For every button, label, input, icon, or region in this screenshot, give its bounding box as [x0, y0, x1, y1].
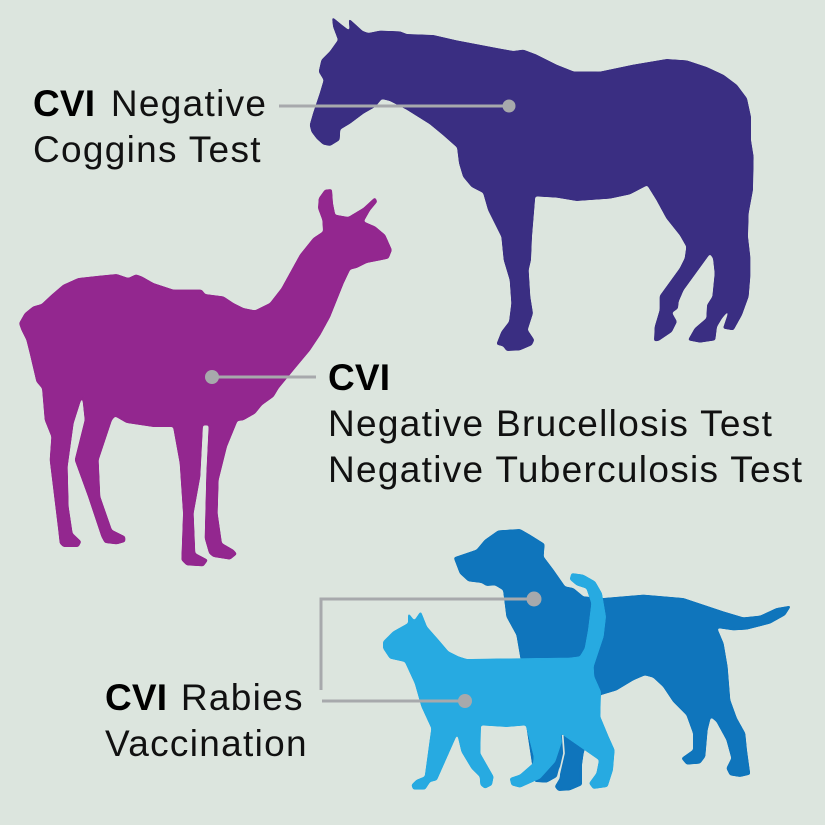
text: llama requirements: Negative Tuberculosis Test — [328, 449, 803, 490]
cat callout line and dot — [322, 694, 472, 708]
dog callout line and dot — [321, 592, 542, 690]
text: llama requirements: Negative Brucellosis Test — [328, 403, 773, 444]
horse silhouette — [310, 17, 753, 351]
text: horse requirements: CVI Negative — [33, 83, 267, 124]
text: horse requirements — [33, 83, 267, 170]
dog silhouette — [454, 529, 791, 791]
horse callout line and dot — [279, 100, 516, 112]
text: dog and cat requirements: CVI Rabies — [105, 677, 304, 718]
llama callout line and dot — [205, 370, 316, 384]
cat silhouette — [383, 573, 614, 789]
text: horse requirements: Coggins Test — [33, 129, 262, 170]
text: llama requirements: CVI — [328, 357, 390, 398]
text: dog and cat requirements: Vaccination — [105, 723, 308, 764]
text: dog and cat requirements — [105, 677, 308, 764]
text: llama requirements — [328, 357, 803, 490]
llama silhouette — [19, 189, 392, 566]
